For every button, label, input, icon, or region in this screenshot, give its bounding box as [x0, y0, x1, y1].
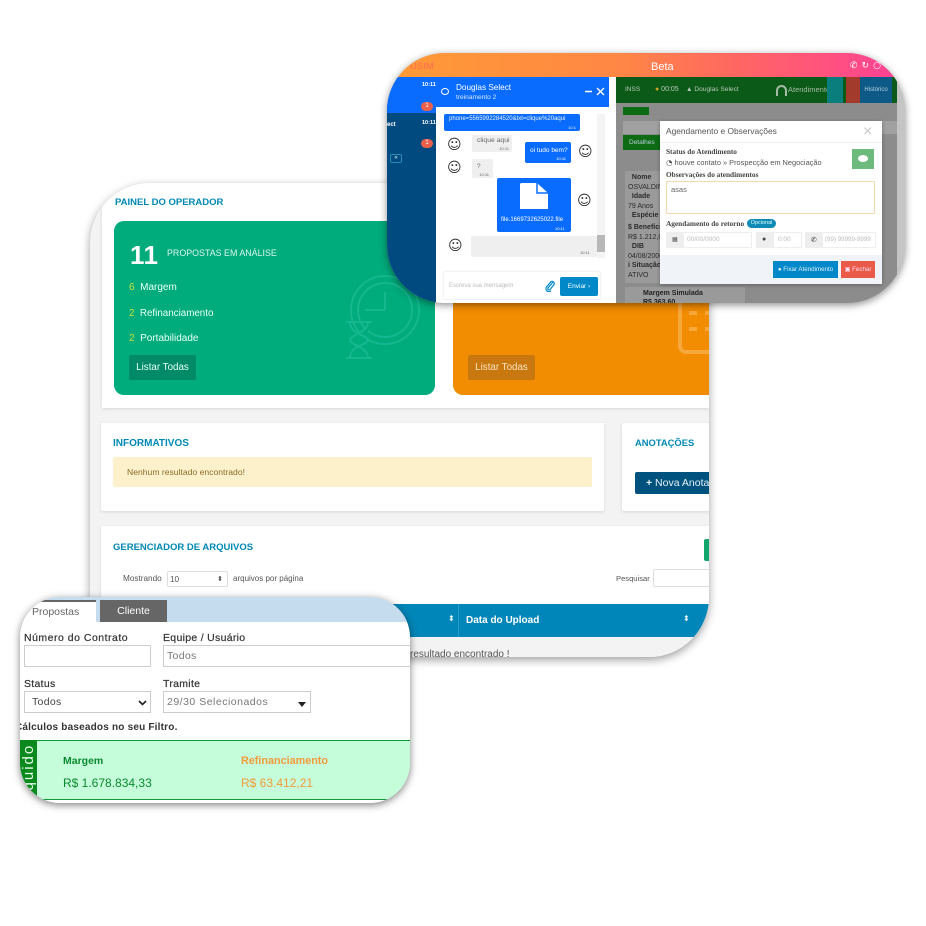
button: listar todas: Listar Todas — [136, 362, 189, 373]
input: equipe usuario: Todos — [167, 650, 197, 662]
icons: phone and refresh: ✆↻○ — [850, 61, 885, 71]
input: phone: (99) 99999-9999 — [825, 236, 871, 243]
label: equipe usuario: Equipe / Usuário — [163, 632, 245, 644]
button: detalhes — [623, 135, 663, 150]
avatar: ☺ — [448, 238, 463, 254]
textarea: asas — [671, 185, 687, 194]
select: page size: ⬍ — [217, 576, 223, 583]
badge — [421, 139, 433, 148]
button: fechar — [841, 261, 875, 278]
label: status: Status do Atendimento — [666, 147, 737, 156]
contact name: Douglas Select — [456, 83, 511, 92]
value: margem: R$ 1.678.834,33 — [63, 776, 152, 790]
message: oi tudo bem — [525, 142, 571, 163]
card: orange — [453, 283, 723, 395]
time: 10:11 — [555, 226, 565, 231]
stat: portabilidade: 2 Portabilidade — [129, 333, 198, 344]
card: propostas em analise — [114, 221, 435, 395]
scrollbar — [597, 114, 605, 258]
time: 10:11 — [422, 120, 436, 126]
chat header — [436, 77, 609, 107]
action: historico: Histórico — [864, 87, 888, 93]
message: file attachment — [497, 178, 571, 232]
modal title: Agendamento e Observações — [666, 126, 777, 136]
time: 10:11 — [580, 250, 590, 255]
message: oi tudo bem: 10:11 — [556, 156, 566, 161]
gray bar — [623, 121, 897, 134]
column: data do upload: Data do Upload — [466, 615, 539, 626]
action: like — [827, 77, 843, 103]
panel: informativos — [101, 423, 604, 511]
heading: gerenciador de arquivos: GERENCIADOR DE ARQUIVOS — [113, 542, 253, 553]
panel: anotacoes — [622, 423, 722, 511]
icon: file — [520, 183, 548, 209]
label: pesquisar: Pesquisar — [616, 574, 650, 583]
input: date: ▦ — [672, 237, 678, 243]
avatar: ☺ — [447, 160, 462, 176]
message input — [444, 272, 600, 299]
label: propostas em analise: PROPOSTAS EM ANÁLISE — [167, 248, 277, 258]
top bar: beta — [387, 53, 905, 77]
message: oi tudo bem: oi tudo bem? — [530, 147, 568, 154]
table row: empty — [101, 637, 709, 657]
button: fixar atendimento — [773, 261, 838, 278]
total: margem: Margem — [63, 755, 103, 767]
message: link: phone=5565992284520&txt=clique%20aqui — [449, 116, 565, 122]
logo text: USIM — [410, 61, 434, 72]
icon: attachment — [545, 280, 555, 292]
heading: anotacoes: ANOTAÇÕES — [635, 437, 694, 448]
header: operator: ▲ Douglas Select — [686, 86, 739, 93]
service header — [616, 77, 897, 103]
tab: cliente: Cliente — [117, 605, 150, 617]
select: tramite: 29/30 Selecionados — [167, 696, 268, 708]
message: question mark: ? — [477, 163, 481, 170]
input: search — [653, 569, 723, 587]
value: refinanciamento: R$ 63.412,21 — [241, 776, 313, 790]
sort icon: ⬍ — [448, 614, 455, 623]
stat: margem: 6 Margem — [129, 282, 177, 293]
scrollbar thumb — [597, 235, 605, 252]
button: detalhes: Detalhes — [629, 139, 655, 146]
sort icon: ⬍ — [683, 614, 690, 623]
textarea — [666, 181, 875, 214]
action: historico — [860, 77, 892, 103]
contact subtitle: treinamento 2 — [456, 94, 496, 101]
message: question mark: 10:11 — [479, 172, 489, 177]
conversation: active — [387, 77, 436, 113]
icon: clock and hourglass — [346, 275, 420, 359]
heading: informativos: INFORMATIVOS — [113, 438, 189, 449]
column divider — [458, 604, 459, 637]
button: nova anotacao — [635, 472, 725, 494]
input: numero do contrato — [24, 645, 151, 667]
total: refinanciamento: Refinanciamento — [241, 755, 328, 767]
input: phone — [805, 232, 876, 248]
label: tramite: Tramite — [163, 678, 200, 690]
badge: 1 — [425, 103, 429, 109]
status value: ◔ houve contato » Prospecção em Negociação — [666, 158, 822, 167]
message: link: 10:1 — [568, 125, 576, 130]
number: 11: 11 — [130, 240, 158, 270]
heading: painel do operador: PAINEL DO OPERADOR — [115, 197, 223, 208]
modal footer — [660, 255, 882, 284]
alert: nenhum resultado: Nenhum resultado encontrado! — [127, 467, 245, 477]
header: inss: INSS — [625, 86, 640, 93]
label: agendamento do retorno: Agendamento do retorno — [666, 219, 744, 228]
panel: totals — [20, 740, 410, 800]
avatar: ☺ — [447, 137, 462, 153]
divider — [660, 142, 882, 143]
client details: Nome OSVALDINO Idade 79 Anos Espécie $ Benefício R$ 1.212,00 DIB 04/08/2006 i Situação ATIVO — [628, 174, 668, 278]
collapse button — [390, 154, 402, 163]
select: page size — [167, 571, 228, 587]
button: listar todas — [468, 355, 535, 380]
margem simulada: Margem Simulada — [643, 290, 703, 297]
message: question mark — [472, 159, 493, 178]
margem simulada — [625, 287, 745, 307]
badge: opcional: Opcional — [751, 220, 772, 226]
sidebar: conversations — [387, 77, 436, 303]
tab: cliente — [100, 600, 167, 622]
placeholder: Escreva sua mensagem — [449, 283, 513, 289]
message: clique aqui — [472, 135, 512, 152]
icon: calendar — [678, 303, 709, 354]
panel: chat window — [436, 77, 616, 303]
input: time — [756, 232, 802, 248]
input: phone: ✆ — [811, 236, 817, 244]
file name: file.1669732625022.file — [501, 217, 563, 223]
label: mostrando: Mostrando — [123, 574, 162, 583]
stat: refinanciamento: 2 Refinanciamento — [129, 308, 213, 319]
input: date — [666, 232, 752, 248]
button: listar todas — [129, 355, 196, 380]
input: equipe usuario — [163, 645, 423, 667]
select: status — [24, 691, 151, 713]
input: date: 00/00/0000 — [687, 236, 720, 243]
panel: proposals filter screenshot — [20, 597, 410, 803]
message: empty gray — [471, 236, 597, 257]
collapse button: « — [394, 155, 398, 161]
panel: service view behind modal — [616, 77, 897, 303]
label: status: Status — [24, 678, 56, 690]
message: link — [444, 114, 580, 131]
icon: chat bubbles — [858, 155, 868, 162]
panel: painel do operador card — [102, 183, 709, 408]
icon: headphones — [776, 85, 787, 96]
badge: 1 — [425, 140, 429, 146]
avatar: ☺ — [577, 193, 592, 209]
tab: propostas: Propostas — [32, 606, 79, 618]
icon: chat bubble — [441, 88, 449, 95]
side label: liquido — [20, 740, 37, 796]
close icon: × — [863, 123, 872, 140]
panel: chat and scheduling screenshot — [387, 53, 905, 303]
message: clique aqui: 10:11 — [499, 146, 509, 151]
label: numero do contrato: Número do Contrato — [24, 632, 128, 644]
title: beta: Beta — [651, 61, 674, 73]
avatar: ☺ — [578, 144, 593, 160]
icon: caret — [298, 702, 306, 707]
button: listar todas: Listar Todas — [475, 362, 528, 373]
icon: chevron — [138, 700, 146, 706]
service label: Atendimento — [788, 85, 830, 94]
modal: agendamento e observacoes — [660, 121, 882, 284]
icons: minimize and expand — [585, 88, 604, 96]
table header — [101, 604, 709, 637]
label: observacoes: Observações do atendimentos — [666, 170, 758, 179]
input: time: ● — [762, 236, 766, 243]
panel: operator dashboard screenshot — [90, 183, 709, 657]
conversation: select: ect — [387, 122, 396, 128]
time: 10:11 — [422, 82, 436, 88]
tab strip — [20, 597, 410, 622]
button: fixar atendimento: ● Fixar Atendimento — [778, 266, 833, 273]
button: green upload — [704, 539, 714, 561]
badge — [421, 102, 433, 111]
header: timer: ● 00:05 — [655, 86, 679, 93]
tab: propostas — [20, 600, 96, 622]
green tag — [623, 107, 649, 115]
button: fechar: ▣ Fechar — [845, 266, 871, 273]
select: page size: 10 — [170, 575, 179, 584]
button: enviar: Enviar › — [568, 283, 590, 290]
label: arquivos por pagina: arquivos por página — [233, 574, 303, 583]
badge: opcional — [747, 219, 776, 228]
select: status: Todos — [32, 696, 62, 708]
panel: gerenciador de arquivos — [101, 526, 709, 657]
button: chat — [852, 149, 874, 169]
alert: nenhum resultado — [113, 457, 592, 487]
input: time: 0:00 — [778, 236, 791, 243]
button: enviar — [560, 277, 598, 296]
message: clique aqui: clique aqui — [477, 137, 510, 144]
select: tramite — [163, 691, 311, 713]
action: dislike — [846, 77, 862, 103]
